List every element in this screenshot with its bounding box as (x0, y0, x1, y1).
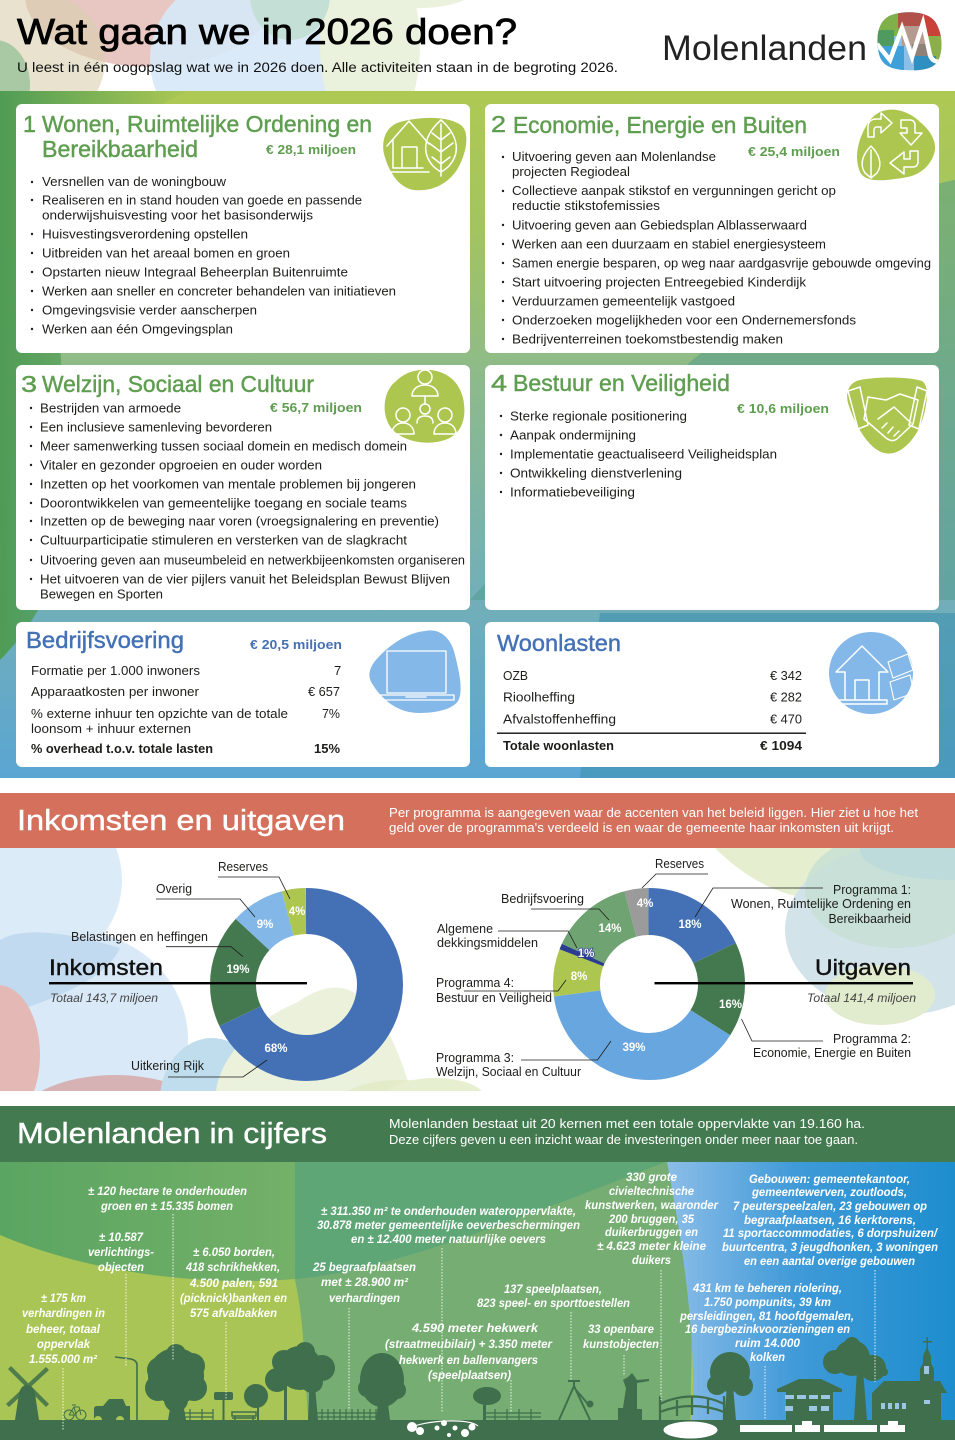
list 1: Werken aan sneller en concreter behandelen van initiatieven (42, 284, 396, 298)
figure: verlichting: ± 10.587 (99, 1232, 144, 1244)
heading Uitgaven (654, 955, 916, 1005)
icon: swing (559, 1381, 592, 1420)
heading Bedrijfsvoering: Bedrijfsvoering (26, 627, 184, 653)
intro text cijfers (389, 1117, 865, 1147)
table woonlasten (497, 668, 806, 753)
figure: water: ± 311.350 m² te onderhouden wateroppervlakte, (321, 1206, 576, 1218)
panel: 3 Welzijn (16, 365, 470, 610)
list 3: Cultuurparticipatie stimuleren en versterken van de slagkracht (40, 532, 407, 548)
figure: verhardingen: ± 175 km (41, 1293, 86, 1305)
intro text inkomsten: Per programma is aangegeven waar de accenten van het beleid liggen. Hier ziet u hoe het (389, 806, 919, 820)
labels: Uitgaven chart: Welzijn, Sociaal en Cultuur (436, 1065, 581, 1079)
icon: bridge (660, 1396, 724, 1420)
figure: speelplaatsen: 137 speelplaatsen, (504, 1284, 602, 1296)
icon: small tree (473, 1387, 501, 1420)
figure: kunstwerken (585, 1172, 719, 1267)
icon: sign (214, 1392, 233, 1420)
table bedrijfsvoering (31, 663, 341, 756)
list 2 (502, 149, 931, 346)
icon: house with money (829, 632, 914, 714)
figure: begraafplaatsen: 25 begraafplaatsen (312, 1262, 416, 1274)
heading 1: Bereikbaarheid (42, 136, 198, 162)
labels: Uitgaven chart: Programma 2: (833, 1032, 911, 1046)
figure: gebouwen: 11 sportaccommodaties, 6 dorpshuizen/ (723, 1228, 939, 1240)
figure: groen en bomen: ± 120 hectare te onderhouden (88, 1186, 247, 1198)
labels: Inkomsten chart: Reserves (218, 860, 268, 874)
icon: logo mark (876, 10, 944, 72)
icon: town house (777, 1379, 842, 1420)
figure: water (317, 1206, 580, 1246)
icon: laptop (369, 630, 461, 713)
figure: riolering: ruim 14.000 (735, 1338, 801, 1350)
figure: hekwerk: (straatmeubilair) + 3.350 meter (385, 1339, 553, 1351)
heading 3: Welzijn, Sociaal en Cultuur (42, 371, 314, 397)
figure: groen en bomen: groen en ± 15.335 bomen (100, 1201, 233, 1213)
table woonlasten: € 342 (770, 668, 802, 683)
labels: Uitgaven chart (436, 857, 911, 1079)
logo Molenlanden: Molenlanden (662, 29, 867, 68)
list 2: reductie stikstofemissies (512, 198, 661, 213)
figure: borden: 418 schrikhekken, (185, 1262, 280, 1274)
chart background blobs (0, 848, 955, 1091)
list 1: Realiseren en in stand houden van goede en passende (42, 192, 362, 208)
icon: pond (664, 1422, 718, 1438)
heading 1: Wonen, Ruimtelijke Ordening en (42, 111, 372, 137)
icon: sewer pipes (740, 1421, 905, 1432)
labels: Inkomsten chart: Belastingen en heffingen (71, 930, 208, 944)
budget 1: € 28,1 miljoen (266, 142, 356, 157)
labels: Uitgaven chart: Wonen, Ruimtelijke Ordening en (731, 897, 911, 911)
icon: street lamp (115, 1357, 137, 1420)
list 4: Implementatie geactualiseerd Veiligheidsplan (510, 446, 777, 462)
figure: riolering (679, 1283, 854, 1364)
figure: groen en bomen (88, 1186, 247, 1213)
figure: hekwerk: 4.590 meter hekwerk (411, 1323, 539, 1335)
figure: kunstobjecten (583, 1324, 659, 1351)
intro text inkomsten: geld over de programma's verdeeld is en waar de gemeente haar inkomsten uit krijgt. (389, 821, 894, 835)
figure: verhardingen: oppervlak (37, 1339, 91, 1351)
panel background gradient (0, 91, 955, 778)
list 1: Huisvestingsverordening opstellen (42, 226, 248, 242)
icon: tree 1 (145, 1344, 207, 1420)
figure: kunstobjecten: kunstobjecten (583, 1339, 659, 1351)
figure: water: 30.878 meter gemeentelijke oeverbeschermingen (317, 1220, 580, 1232)
icon: church (872, 1337, 947, 1420)
table bedrijfsvoering: € 657 (308, 684, 340, 699)
figure: gebouwen: Gebouwen: gemeentekantoor, (749, 1174, 910, 1186)
labels: Uitgaven chart: Programma 4: (436, 976, 514, 990)
budget 4: € 10,6 miljoen (737, 401, 829, 416)
heading inkomsten en uitgaven: Inkomsten en uitgaven (17, 805, 345, 837)
figure: verlichting (88, 1232, 154, 1274)
figure: gebouwen: buurtcentra, 3 jeugdhonken, 3 woningen (722, 1242, 938, 1254)
icon: tree right (707, 1352, 753, 1420)
list 2: Onderzoeken mogelijkheden voor een Ondernemersfonds (512, 312, 857, 328)
heading Inkomsten: Totaal 143,7 miljoen (50, 991, 158, 1005)
figure: borden: 4.500 palen, 591 (189, 1278, 278, 1290)
table woonlasten: € 282 (770, 690, 802, 704)
heading 1 (23, 111, 372, 162)
heading 4: Bestuur en Veiligheid (513, 370, 730, 396)
figure: kunstwerken: ± 4.623 meter kleine (597, 1241, 707, 1253)
labels: Uitgaven chart: Bereikbaarheid (828, 912, 911, 926)
logo Molenlanden (662, 10, 944, 72)
icon: windmill (6, 1366, 49, 1420)
figure: gebouwen: 7 peuterspeelzalen, 23 gebouwen op (733, 1201, 927, 1213)
list 2: Bedrijventerreinen toekomstbestendig maken (512, 332, 783, 346)
chart: Uitgaven donut: 39% (622, 1042, 646, 1054)
figure: kunstwerken: civieltechnische (609, 1186, 695, 1198)
list 2: Start uitvoering projecten Entreegebied Kinderdijk (512, 274, 807, 290)
table bedrijfsvoering: % overhead t.o.v. totale lasten (31, 741, 213, 756)
icon: people network (385, 370, 464, 443)
list 4: Informatiebeveiliging (510, 484, 635, 500)
table bedrijfsvoering: 7% (322, 706, 340, 721)
table woonlasten: € 470 (770, 712, 802, 726)
figure: hekwerk (385, 1323, 553, 1382)
chart: Uitgaven donut: 16% (719, 999, 742, 1011)
chart: Inkomsten donut: 4% (289, 906, 305, 918)
list 4: Ontwikkeling dienstverlening (510, 466, 682, 480)
figure: verhardingen: beheer, totaal (26, 1324, 101, 1336)
icon: handshake (847, 377, 927, 454)
list 1: Uitbreiden van het areaal bomen en groen (42, 246, 290, 260)
chart: Uitgaven donut (571, 898, 742, 1056)
labels: Uitgaven chart: Economie, Energie en Buiten (753, 1046, 911, 1060)
table bedrijfsvoering: 15% (314, 741, 340, 756)
figure: riolering: 16 bergbezinkvoorzieningen en (685, 1324, 850, 1336)
icon: large tree right (823, 1337, 888, 1420)
heading Inkomsten: Inkomsten (49, 955, 163, 980)
table woonlasten: Totale woonlasten (503, 738, 614, 753)
figure: speelplaatsen (477, 1284, 630, 1310)
budget 3: € 56,7 miljoen (270, 400, 362, 415)
figure: borden (180, 1247, 287, 1320)
heading 1: 1 (23, 111, 36, 137)
list 2: Collectieve aanpak stikstof en vergunningen gericht op (512, 183, 836, 198)
icon: fences and bench (178, 1409, 541, 1420)
table bedrijfsvoering: Formatie per 1.000 inwoners (31, 663, 200, 678)
icon: car (94, 1399, 130, 1420)
list 4: Sterke regionale positionering (510, 408, 687, 424)
icon: bicycle (64, 1405, 86, 1420)
figure: gebouwen: begraafplaatsen, 16 kerktorens, (744, 1215, 916, 1227)
list 3: Doorontwikkelen van gemeentelijke toegang en sociale teams (40, 496, 408, 510)
list 1: onderwijshuisvesting voor het basisonderwijs (42, 208, 314, 222)
list 1: Opstarten nieuw Integraal Beheerplan Buitenruimte (42, 264, 348, 280)
table bedrijfsvoering: Apparaatkosten per inwoner (31, 684, 200, 699)
figure: borden: (picknick)banken en (180, 1293, 287, 1305)
labels: Uitgaven chart: Bestuur en Veiligheid (436, 991, 552, 1005)
figure: riolering: 1.750 pompunits, 39 km (704, 1297, 831, 1309)
dotted leader lines (63, 1214, 875, 1430)
list 1: Werken aan één Omgevingsplan (42, 322, 233, 336)
figure: borden: ± 6.050 borden, (193, 1247, 275, 1259)
heading Inkomsten (49, 955, 307, 1005)
heading 3: 3 (21, 371, 37, 397)
list 3: Meer samenwerking tussen sociaal domein en medisch domein (40, 438, 407, 454)
figure: riolering: 431 km te beheren riolering, (692, 1283, 842, 1295)
title: Wat gaan we in 2026 doen? (17, 11, 517, 52)
labels: Inkomsten chart: Overig (156, 882, 192, 896)
icon: house and leaf (383, 118, 466, 190)
table woonlasten: € 1094 (760, 738, 803, 753)
table woonlasten: Afvalstoffenheffing (503, 712, 616, 726)
landscape silhouettes (0, 1337, 955, 1440)
heading cijfers: Molenlanden in cijfers (17, 1118, 327, 1150)
list 3 (30, 400, 465, 602)
chart: Uitgaven donut: 18% (678, 919, 702, 931)
list 2: Samen energie besparen, op weg naar aardgasvrije gebouwde omgeving (512, 256, 931, 270)
table bedrijfsvoering: loonsom + inhuur externen (31, 721, 191, 736)
figure: gebouwen (722, 1174, 939, 1268)
labels: Inkomsten chart (71, 860, 290, 1077)
figure: verhardingen: 1.555.000 m² (29, 1354, 98, 1366)
heading Uitgaven: Uitgaven (815, 955, 911, 980)
icon: circular economy (857, 110, 935, 180)
labels: Uitgaven chart: Bedrijfsvoering (501, 892, 584, 906)
list 3: Het uitvoeren van de vier pijlers vanuit het Beleidsplan Bewust Blijven (40, 572, 450, 586)
heading 2: 2 (491, 111, 506, 137)
list 3: Bestrijden van armoede (40, 400, 181, 416)
figure: kunstwerken: 200 bruggen, 35 (608, 1214, 695, 1226)
figure: verhardingen (22, 1293, 105, 1366)
chart: Uitgaven donut: 4% (637, 898, 653, 910)
icon: statue (618, 1373, 649, 1420)
labels: Uitgaven chart: Programma 1: (833, 883, 911, 897)
chart: Uitgaven donut: 14% (598, 923, 622, 935)
list 2: projecten Regiodeal (512, 164, 630, 179)
labels: Uitgaven chart: Reserves (655, 857, 704, 871)
list 1: Omgevingsvisie verder aanscherpen (42, 302, 257, 318)
list 3: Inzetten op de beweging naar voren (vroegsignalering en preventie) (40, 514, 439, 528)
figure: begraafplaatsen: verhardingen (329, 1293, 400, 1305)
figure: begraafplaatsen: met ± 28.900 m² (321, 1277, 409, 1289)
chart: Uitgaven donut: 1% (578, 948, 594, 960)
figure: verlichting: objecten (98, 1262, 144, 1274)
chart: Inkomsten donut: 9% (257, 919, 273, 931)
figure: kunstwerken: duikerbruggen en (605, 1227, 698, 1239)
chart: Inkomsten donut (226, 906, 380, 1058)
figure: gebouwen: en een aantal overige gebouwen (744, 1256, 915, 1268)
intro text cijfers: Deze cijfers geven u een inzicht waar de investeringen onder meer naar toe gaan. (389, 1133, 858, 1147)
section band: Molenlanden in cijfers (0, 1106, 955, 1162)
chart: Inkomsten donut: 19% (226, 964, 250, 976)
labels: Uitgaven chart: Programma 3: (436, 1051, 514, 1065)
heading 2: Economie, Energie en Buiten (513, 112, 807, 138)
figure: hekwerk: hekwerk en ballenvangers (399, 1355, 538, 1367)
list 2: Uitvoering geven aan Gebiedsplan Alblasserwaard (512, 218, 807, 232)
table woonlasten: Rioolheffing (503, 690, 575, 704)
table bedrijfsvoering: 7 (334, 663, 341, 678)
panel: 4 Bestuur (485, 365, 939, 610)
heading Uitgaven: Totaal 141,4 miljoen (807, 991, 916, 1005)
header background blobs (0, 0, 464, 91)
chart: Uitgaven donut: 8% (571, 971, 587, 983)
panel: 1 Wonen (16, 104, 470, 353)
figure: begraafplaatsen (312, 1262, 416, 1305)
heading Woonlasten: Woonlasten (497, 630, 621, 656)
figure: water: en ± 12.400 meter natuurlijke oevers (351, 1234, 546, 1246)
list 1: Versnellen van de woningbouw (42, 174, 227, 189)
labels: Uitgaven chart: dekkingsmiddelen (437, 936, 538, 950)
figure: gebouwen: gemeentewerven, zoutloods, (751, 1187, 907, 1199)
list 3: Vitaler en gezonder opgroeien en ouder worden (40, 458, 322, 472)
section band: Inkomsten en uitgaven (0, 793, 955, 848)
figure: speelplaatsen: 823 speel- en sporttoestellen (477, 1298, 630, 1310)
intro text inkomsten (389, 806, 919, 835)
figure: kunstwerken: 330 grote (626, 1172, 678, 1184)
list 4: Aanpak ondermijning (510, 428, 636, 442)
list 2: Verduurzamen gemeentelijk vastgoed (512, 294, 735, 308)
list 3: Uitvoering geven aan museumbeleid en netwerkbijeenkomsten organiseren (40, 552, 465, 568)
intro text cijfers: Molenlanden bestaat uit 20 kernen met een totale oppervlakte van 19.160 ha. (389, 1117, 865, 1131)
figure: hekwerk: (speelplaatsen) (428, 1370, 511, 1382)
list 3: Inzetten op het voorkomen van mentale problemen bij jongeren (40, 476, 416, 492)
figure: kunstwerken: kunstwerken, waaronder (585, 1200, 719, 1212)
labels: Inkomsten chart: Uitkering Rijk (131, 1059, 205, 1073)
budget bedrijfsvoering: € 20,5 miljoen (250, 637, 342, 652)
list 4 (500, 408, 777, 500)
figure: kunstobjecten: 33 openbare (588, 1324, 655, 1336)
budget 2: € 25,4 miljoen (748, 144, 840, 159)
list 1 (31, 174, 396, 336)
list 3: Een inclusieve samenleving bevorderen (40, 420, 272, 434)
landscape background (0, 1162, 955, 1440)
figure: verhardingen: verhardingen in (22, 1308, 105, 1320)
table bedrijfsvoering: % externe inhuur ten opzichte van de totale (31, 706, 288, 721)
subtitle: U leest in één oogopslag wat we in 2026 doen. Alle activiteiten staan in de begroting 2026. (17, 60, 618, 75)
panel: Bedrijfsvoering (16, 622, 470, 767)
list 3: Bewegen en Sporten (40, 586, 163, 602)
chart: Inkomsten donut: 68% (264, 1043, 288, 1055)
table woonlasten: OZB (503, 668, 528, 683)
panel: 2 Economie (485, 104, 939, 353)
icon: trees middle (244, 1342, 406, 1420)
heading 4: 4 (491, 370, 507, 396)
figure: riolering: kolken (750, 1352, 785, 1364)
labels: Uitgaven chart: Algemene (437, 922, 493, 936)
icon: playground pond (407, 1420, 478, 1437)
figure: verlichting: verlichtings- (88, 1247, 154, 1259)
figure: riolering: persleidingen, 81 hoofdgemalen, (679, 1311, 854, 1323)
list 2: Uitvoering geven aan Molenlandse (512, 149, 716, 164)
panel: Woonlasten (485, 622, 939, 767)
figure: borden: 575 afvalbakken (190, 1308, 277, 1320)
list 2: Werken aan een duurzaam en stabiel energiesysteem (512, 236, 826, 252)
figure: kunstwerken: duikers (632, 1255, 671, 1267)
